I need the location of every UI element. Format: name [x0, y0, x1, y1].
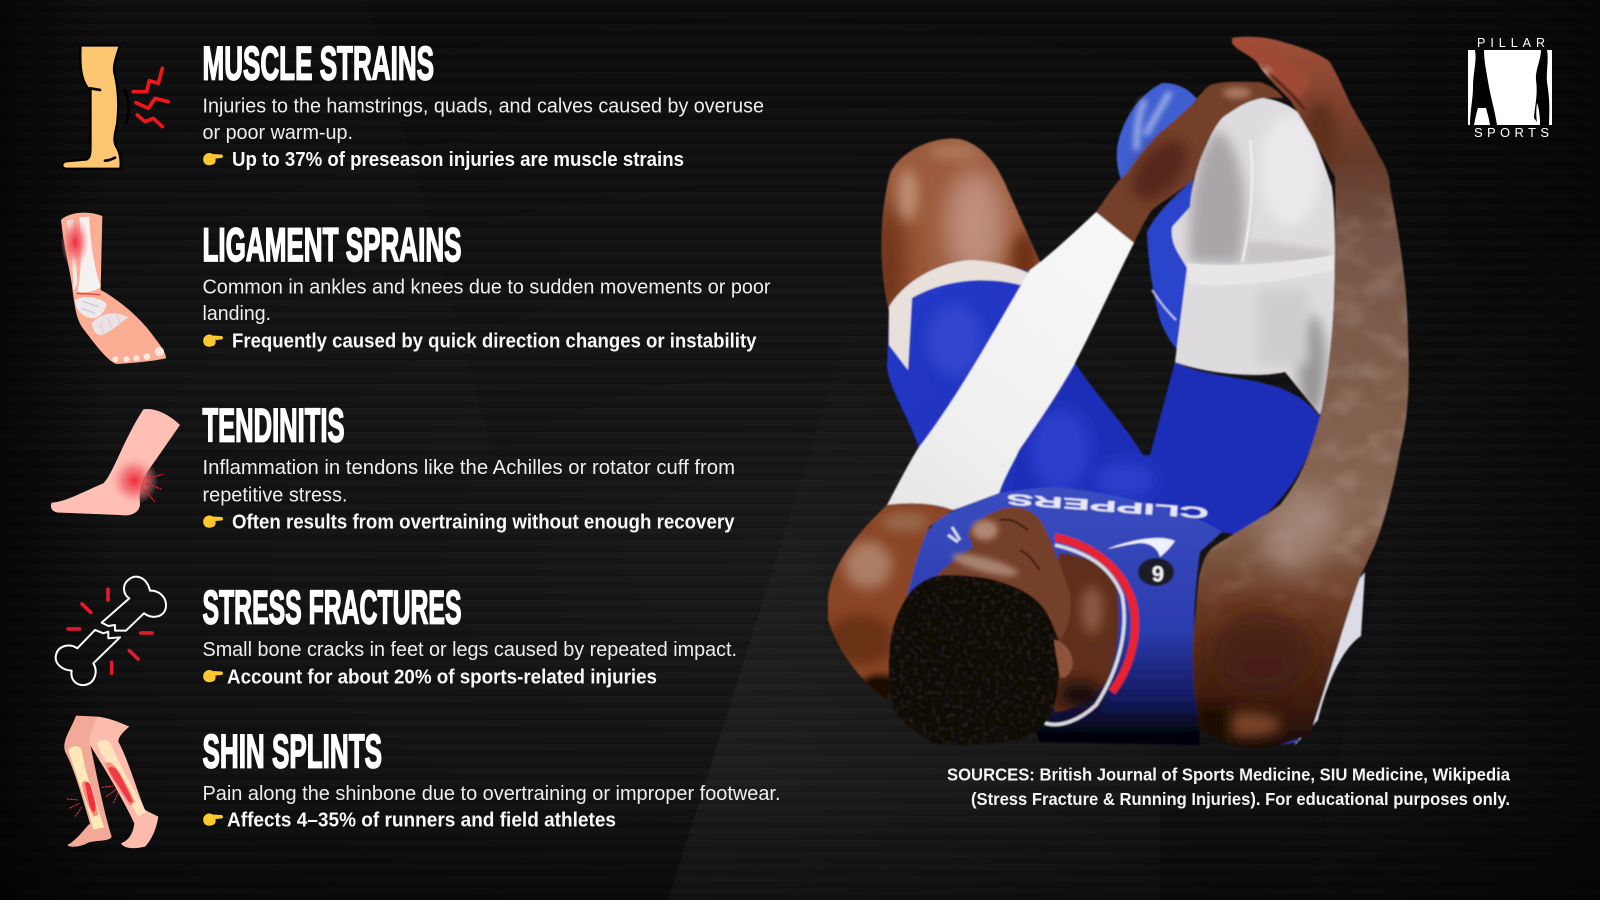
text: shin splints description: Pain along the shinbone due to overtraining or improper footwear. [202, 782, 780, 805]
section: stress fractures [56, 577, 737, 688]
callout: shin splints stat: Affects 4–35% of runners and field athletes [227, 810, 616, 832]
icon: fractured bone [56, 577, 166, 685]
illustration: injured basketball player [820, 30, 1420, 750]
sources note: SOURCES: British Journal of Sports Medicine, SIU Medicine, Wikipedia [947, 765, 1510, 785]
white compression sleeve on knee [1170, 96, 1336, 416]
raised thigh and knee [880, 138, 1041, 312]
icon: pointing hand [203, 153, 223, 165]
icon: legs with shin splints [64, 716, 158, 848]
blue shoe [1117, 83, 1200, 180]
icon: pointing hand [203, 814, 223, 826]
text: tendinitis description: repetitive stress. [202, 484, 348, 506]
text: stress fractures description: Small bone cracks in feet or legs caused by repeated impact. [202, 638, 737, 661]
blue shorts behind knee [1147, 180, 1193, 350]
logo: pillar sports [1468, 36, 1552, 140]
jersey: CLIPPERS [1006, 490, 1209, 521]
text: tendinitis description: Inflammation in tendons like the Achilles or rotator cuff from [202, 456, 735, 479]
callout: tendinitis stat: Often results from overtraining without enough recovery [232, 511, 735, 533]
text: muscle strains description: or poor warm-up. [202, 121, 353, 144]
blue shorts lower right [1280, 642, 1338, 745]
hair [888, 574, 1060, 746]
logo: pillar sports: SPORTS [1474, 125, 1549, 140]
text: muscle strains description [202, 94, 764, 144]
heading: muscle strains: MUSCLE STRAINS [202, 36, 434, 89]
heading: stress fractures: STRESS FRACTURES [202, 580, 462, 633]
text: tendinitis description [202, 456, 735, 506]
section: tendinitis [51, 399, 735, 533]
left shoulder [827, 502, 953, 700]
ear [1054, 640, 1073, 678]
shorts [887, 260, 1320, 535]
forearm and left hand [1096, 82, 1283, 243]
icon: pointing hand [203, 516, 223, 528]
section: shin splints [64, 716, 781, 848]
section: ligament sprains [61, 213, 771, 364]
icon: leg with muscle strain [63, 47, 168, 168]
heading: ligament sprains: LIGAMENT SPRAINS [202, 218, 462, 271]
heading: shin splints: SHIN SPLINTS [202, 724, 382, 777]
text: ligament sprains description: Common in ankles and knees due to sudden movements or poor [202, 275, 771, 298]
jersey [905, 487, 1222, 745]
white shorts hem [1295, 572, 1365, 745]
section: muscle strains [63, 36, 764, 171]
jersey collar [1045, 537, 1135, 724]
right forearm and hand [1190, 30, 1420, 750]
text: ligament sprains description: landing. [202, 302, 271, 325]
icon: heel with inflamed tendon [51, 409, 180, 515]
sources note: (Stress Fracture & Running Injuries). For educational purposes only. [971, 789, 1510, 809]
logo: pillar sports: PILLAR [1477, 36, 1545, 50]
sources note [947, 765, 1510, 809]
face [925, 507, 1071, 640]
heading: tendinitis: TENDINITIS [202, 399, 344, 452]
callout: stress fractures stat: Account for about 20% of sports-related injuries [227, 666, 657, 688]
neck [1040, 553, 1119, 712]
icon: pointing hand [203, 670, 223, 682]
text: ligament sprains description [202, 275, 771, 325]
callout: ligament sprains stat: Frequently caused by quick direction changes or instability [232, 330, 757, 352]
icon: foot with sprained ligament [61, 213, 166, 364]
callout: muscle strains stat: Up to 37% of preseason injuries are muscle strains [232, 149, 684, 171]
jersey: 6 [1152, 561, 1164, 586]
icon: handstand silhouettes [1470, 50, 1549, 125]
sleeve-covered arm [887, 212, 1134, 510]
text: muscle strains description: Injuries to the hamstrings, quads, and calves caused by overuse [202, 94, 764, 118]
icon: pointing hand [203, 334, 223, 347]
